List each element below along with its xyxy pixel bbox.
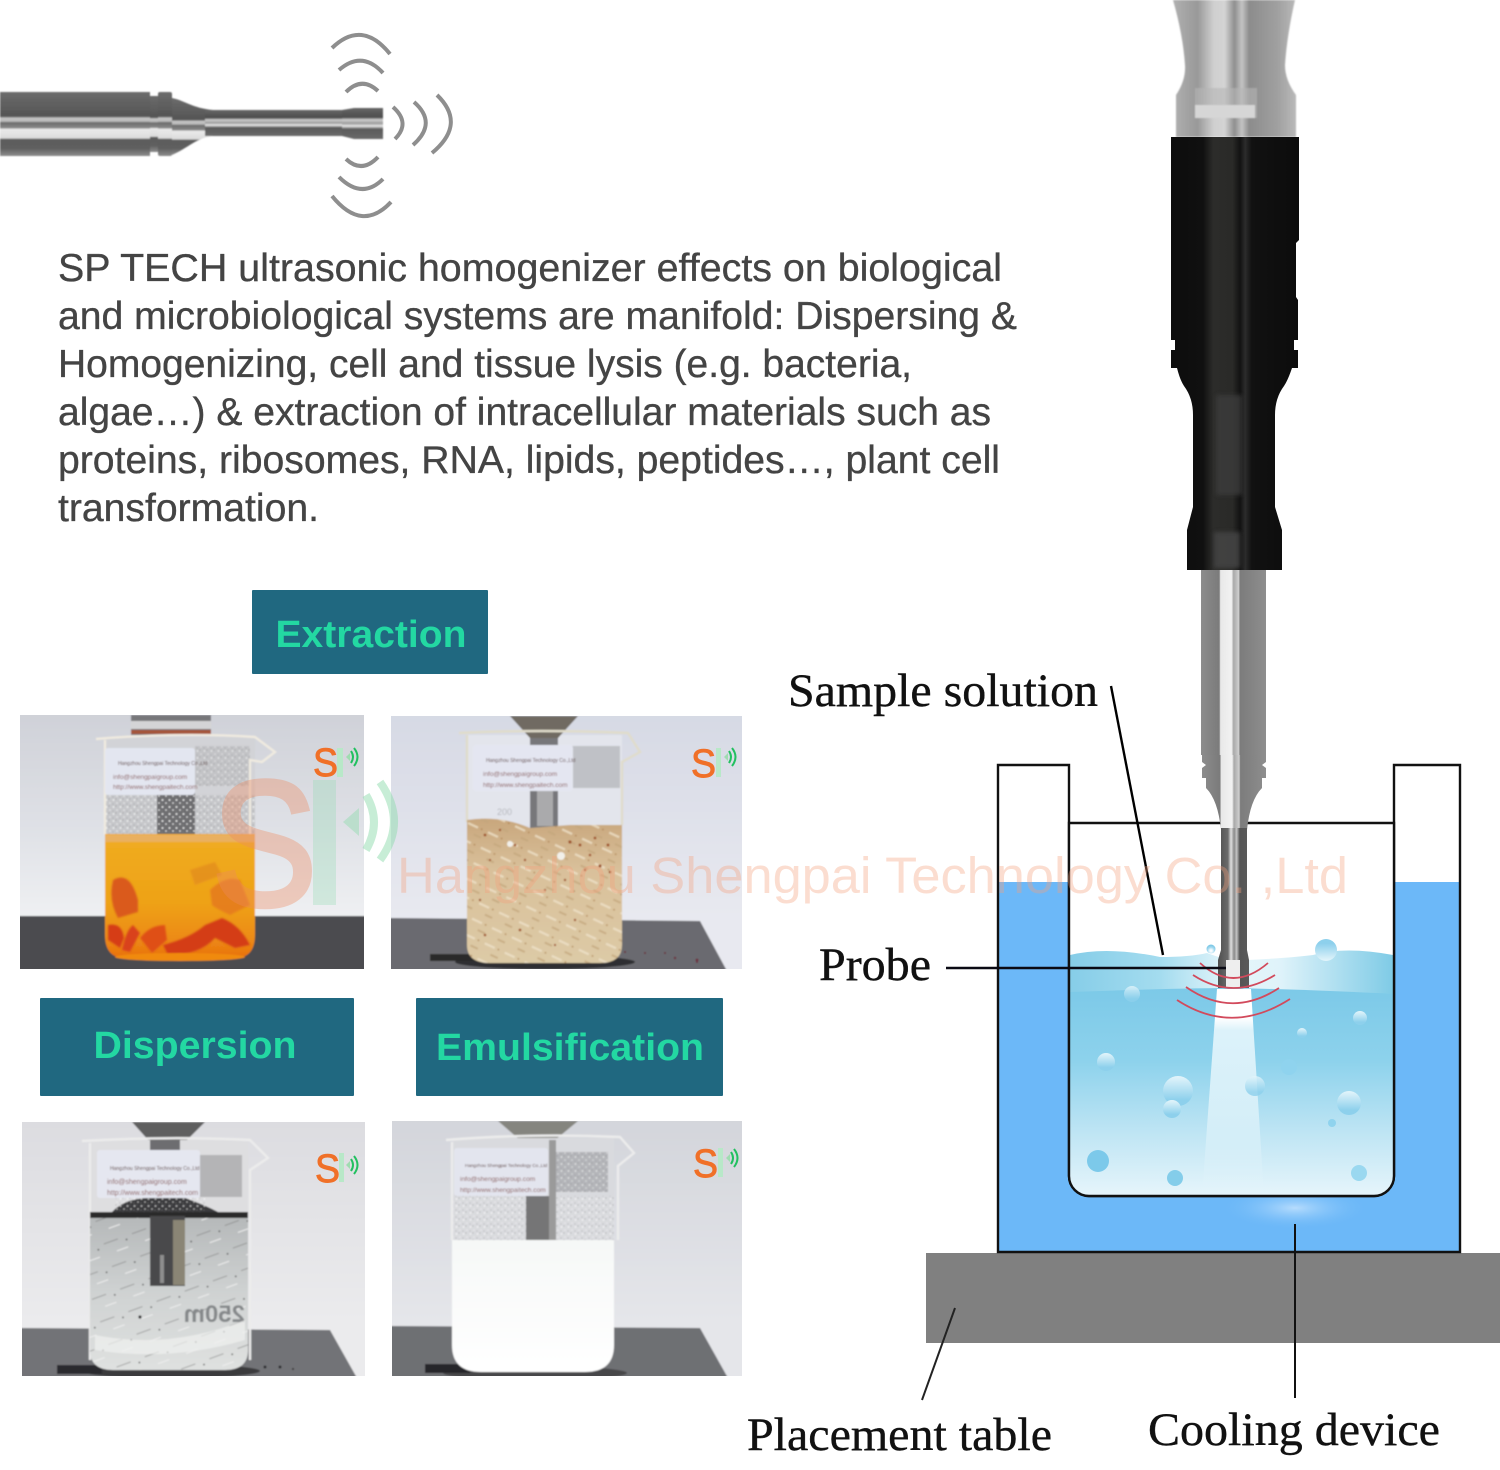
cooling device water xyxy=(998,882,1460,1252)
logo: SI photo 2: S xyxy=(691,742,716,786)
logo: SI photo 1: S xyxy=(313,741,338,785)
bubbles xyxy=(1087,939,1367,1186)
probe shaft xyxy=(0,92,383,156)
logo: SI photo 4 xyxy=(693,1142,738,1186)
logo: SI photo 2 xyxy=(691,742,736,786)
photo: emulsification beaker: Hangzhou Shengpai Technology Co.,Ltd xyxy=(465,1163,548,1168)
photo: extraction beaker: info@shengpaigroup.com xyxy=(113,774,187,781)
photo: emulsification beaker: info@shengpaigroup.com xyxy=(460,1176,536,1183)
callout: Sample solution: Sample solution xyxy=(788,665,1098,717)
logo: SI photo 3 xyxy=(315,1147,358,1191)
cooling device outline xyxy=(998,765,1460,1252)
callout: Placement table xyxy=(747,1308,1052,1461)
cooling device glow xyxy=(1220,1186,1370,1230)
placement table xyxy=(926,1253,1500,1343)
vertical ultrasonic handpiece xyxy=(1171,0,1299,988)
photo: tan beaker with flakes: http://www.shengpaitech.com xyxy=(483,782,568,789)
intro paragraph: SP TECH ultrasonic homogenizer effects on biological xyxy=(58,247,1002,290)
photo: emulsification beaker xyxy=(390,1119,744,1380)
badge: Dispersion: Dispersion xyxy=(94,1025,296,1067)
photo: dispersion beaker: 250m xyxy=(184,1301,245,1328)
watermark xyxy=(212,744,1348,943)
intro paragraph xyxy=(58,247,1017,530)
sound waves in water xyxy=(1177,963,1290,1018)
photo: emulsification beaker: http://www.shengpaitech.com xyxy=(460,1187,546,1194)
photo: tan beaker with flakes: Hangzhou Shengpai Technology Co.,Ltd xyxy=(486,758,576,764)
sound waves xyxy=(332,35,451,216)
photo: tan beaker with flakes: 200 xyxy=(497,807,512,817)
badge: Dispersion xyxy=(40,998,354,1096)
collar xyxy=(1202,755,1266,830)
photo: dispersion beaker xyxy=(20,1120,367,1378)
logo: SI photo 3: S xyxy=(315,1147,340,1191)
watermark: S xyxy=(212,744,317,943)
photo: dispersion beaker: Hangzhou Shengpai Technology Co.,Ltd xyxy=(110,1166,200,1172)
logo: SI photo 4: S xyxy=(693,1142,718,1186)
photo: dispersion beaker: info@shengpaigroup.com xyxy=(107,1179,187,1186)
badge: Emulsification xyxy=(416,998,723,1096)
badge: Extraction xyxy=(252,590,488,674)
beaker rim and walls xyxy=(1069,823,1394,1196)
photo: extraction beaker xyxy=(18,713,366,971)
thin probe xyxy=(1218,828,1249,988)
intro paragraph: transformation. xyxy=(58,487,319,530)
photo: extraction beaker: Hangzhou Shengpai Technology Co.,Ltd xyxy=(118,761,208,767)
steel rod xyxy=(1201,570,1266,755)
sample beaker with water xyxy=(1070,824,1393,1196)
icon: horizontal ultrasonic probe with sound waves xyxy=(0,35,451,216)
callout: Sample solution xyxy=(788,665,1163,955)
photo: extraction beaker: http://www.shengpaitech.com xyxy=(113,784,198,791)
intro paragraph: and microbiological systems are manifold: Dispersing & xyxy=(58,295,1017,338)
callout: Cooling device: Cooling device xyxy=(1148,1404,1440,1456)
photo: dispersion beaker: http://www.shengpaitech.com xyxy=(107,1190,198,1197)
callout: Probe: Probe xyxy=(819,939,931,991)
intro paragraph: proteins, ribosomes, RNA, lipids, peptides…, plant cell xyxy=(58,439,1000,482)
black grip xyxy=(1171,137,1299,570)
photo: tan beaker with flakes: info@shengpaigroup.com xyxy=(483,771,557,778)
badge: Emulsification: Emulsification xyxy=(436,1027,704,1069)
silver handle xyxy=(1173,0,1296,137)
badge: Extraction: Extraction xyxy=(276,614,466,656)
photo: tan beaker with flakes xyxy=(389,714,744,971)
logo: SI photo 1 xyxy=(313,741,358,785)
watermark: Hangzhou Shengpai Technology Co. ,Ltd xyxy=(397,847,1348,904)
callout: Placement table: Placement table xyxy=(747,1409,1052,1461)
intro paragraph: Homogenizing, cell and tissue lysis (e.g. bacteria, xyxy=(58,343,912,386)
intro paragraph: algae…) & extraction of intracellular materials such as xyxy=(58,391,991,434)
